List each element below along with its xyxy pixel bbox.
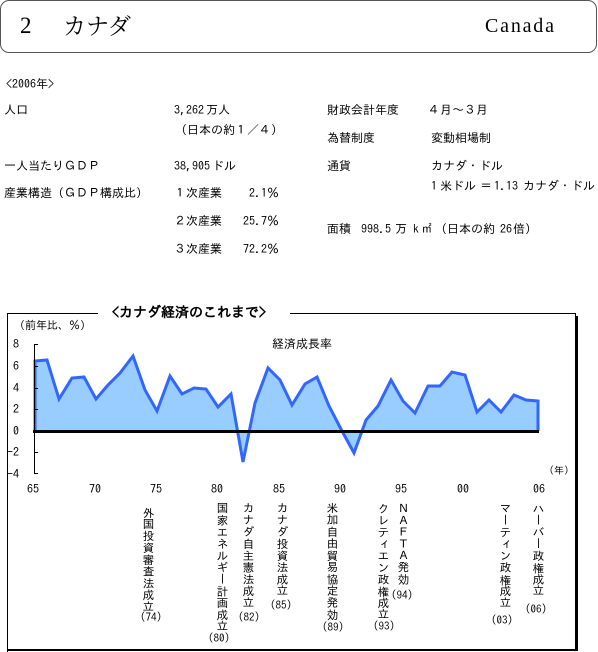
y axis labels: 6: [13, 360, 19, 372]
left facts: 72.2％: [243, 243, 279, 255]
left facts: 38,905ドル: [174, 160, 236, 172]
y axis labels: [7, 338, 19, 480]
event: 1985: [270, 502, 292, 611]
x axis labels: 80: [211, 483, 223, 495]
year note: <2006年>: [6, 78, 54, 90]
x axis unit: (年): [549, 466, 569, 476]
event: 2006: [525, 502, 547, 615]
left facts: ３次産業: [174, 243, 222, 255]
event: 1974: [140, 506, 162, 623]
event: 1994: (94): [391, 590, 413, 601]
left facts: 一人当たりＧＤＰ: [4, 160, 100, 172]
left facts: 25.7％: [243, 215, 279, 227]
event: 1974: 外国投資審査法成立: [143, 506, 154, 612]
event: 2006: (06): [525, 604, 547, 615]
chart: economic growth rate: [33, 344, 539, 474]
event: 1993: (93): [373, 621, 395, 632]
x axis labels: 90: [334, 483, 346, 495]
left facts: 人口: [4, 104, 28, 116]
y axis labels: 4: [13, 382, 19, 394]
event: 1994: ＮＡＦＴＡ発効: [398, 502, 409, 585]
event: 1985: カナダ投資法成立: [277, 502, 288, 596]
event: 1982: カナダ自主憲法成立: [243, 502, 254, 608]
right facts: 為替制度: [327, 132, 375, 144]
axis unit: （前年比、％）: [14, 320, 91, 331]
title banner: [0, 0, 597, 53]
left facts: [4, 104, 283, 255]
left facts: １次産業: [174, 187, 222, 199]
event: 2003: マーティン政権成立: [500, 502, 511, 608]
event: 1985: (85): [270, 600, 292, 611]
series label: 経済成長率: [272, 338, 332, 350]
x axis labels: [27, 483, 545, 495]
left facts: 2.1％: [249, 187, 279, 199]
title: Japanese name: カナダ: [63, 8, 131, 41]
right facts: 財政会計年度: [327, 104, 399, 116]
event: 1989: [322, 502, 344, 633]
left facts: ２次産業: [174, 215, 222, 227]
x axis labels: 65: [27, 483, 39, 495]
left facts: 3,262万人: [174, 104, 230, 116]
event: 1993: [373, 502, 395, 632]
right facts: 1米ドル ＝1.13 カナダ・ドル: [431, 180, 595, 192]
x axis labels: 85: [273, 483, 285, 495]
x axis labels: 00: [457, 483, 469, 495]
event: 1974: (74): [140, 612, 162, 623]
event: 1989: 米加自由貿易協定発効: [327, 502, 338, 620]
y axis labels: -4: [7, 468, 19, 480]
event: 1980: [208, 502, 230, 644]
event: 1982: (82): [238, 612, 260, 623]
event: 1980: (80): [208, 633, 230, 644]
right facts: 面積 998.5 万 k㎡（日本の約 26倍）: [327, 223, 537, 235]
right facts: 通貨: [327, 160, 351, 172]
y axis labels: 8: [13, 338, 19, 350]
event: 1982: [238, 502, 260, 623]
right facts: 変動相場制: [431, 132, 491, 144]
event: 1980: 国家エネルギー計画成立: [217, 502, 228, 632]
event: 2006: ハーバー政権成立: [533, 502, 544, 596]
y axis labels: -2: [7, 446, 19, 458]
event: 2003: [491, 502, 513, 626]
right facts: カナダ・ドル: [431, 160, 503, 172]
event: 2003: (03): [491, 615, 513, 626]
event: 1994: [391, 502, 413, 601]
title: number and country name: 2: [20, 13, 32, 38]
x axis labels: 95: [395, 483, 407, 495]
x axis labels: 06: [533, 483, 545, 495]
y axis labels: 0: [13, 425, 19, 437]
event: 1989: (89): [322, 622, 344, 633]
title: English name: Canada: [485, 15, 556, 37]
y axis labels: 2: [13, 403, 19, 415]
chart title: <カナダ経済のこれまで>: [112, 305, 266, 319]
event: 1993: クレティエン政権成立: [378, 502, 389, 620]
left facts: （日本の約１／４）: [175, 124, 283, 136]
left facts: 産業構造（ＧＤＰ構成比）: [4, 187, 148, 199]
x axis labels: 70: [89, 483, 101, 495]
x axis labels: 75: [150, 483, 162, 495]
right facts: [327, 104, 595, 235]
right facts: ４月～３月: [428, 104, 488, 116]
